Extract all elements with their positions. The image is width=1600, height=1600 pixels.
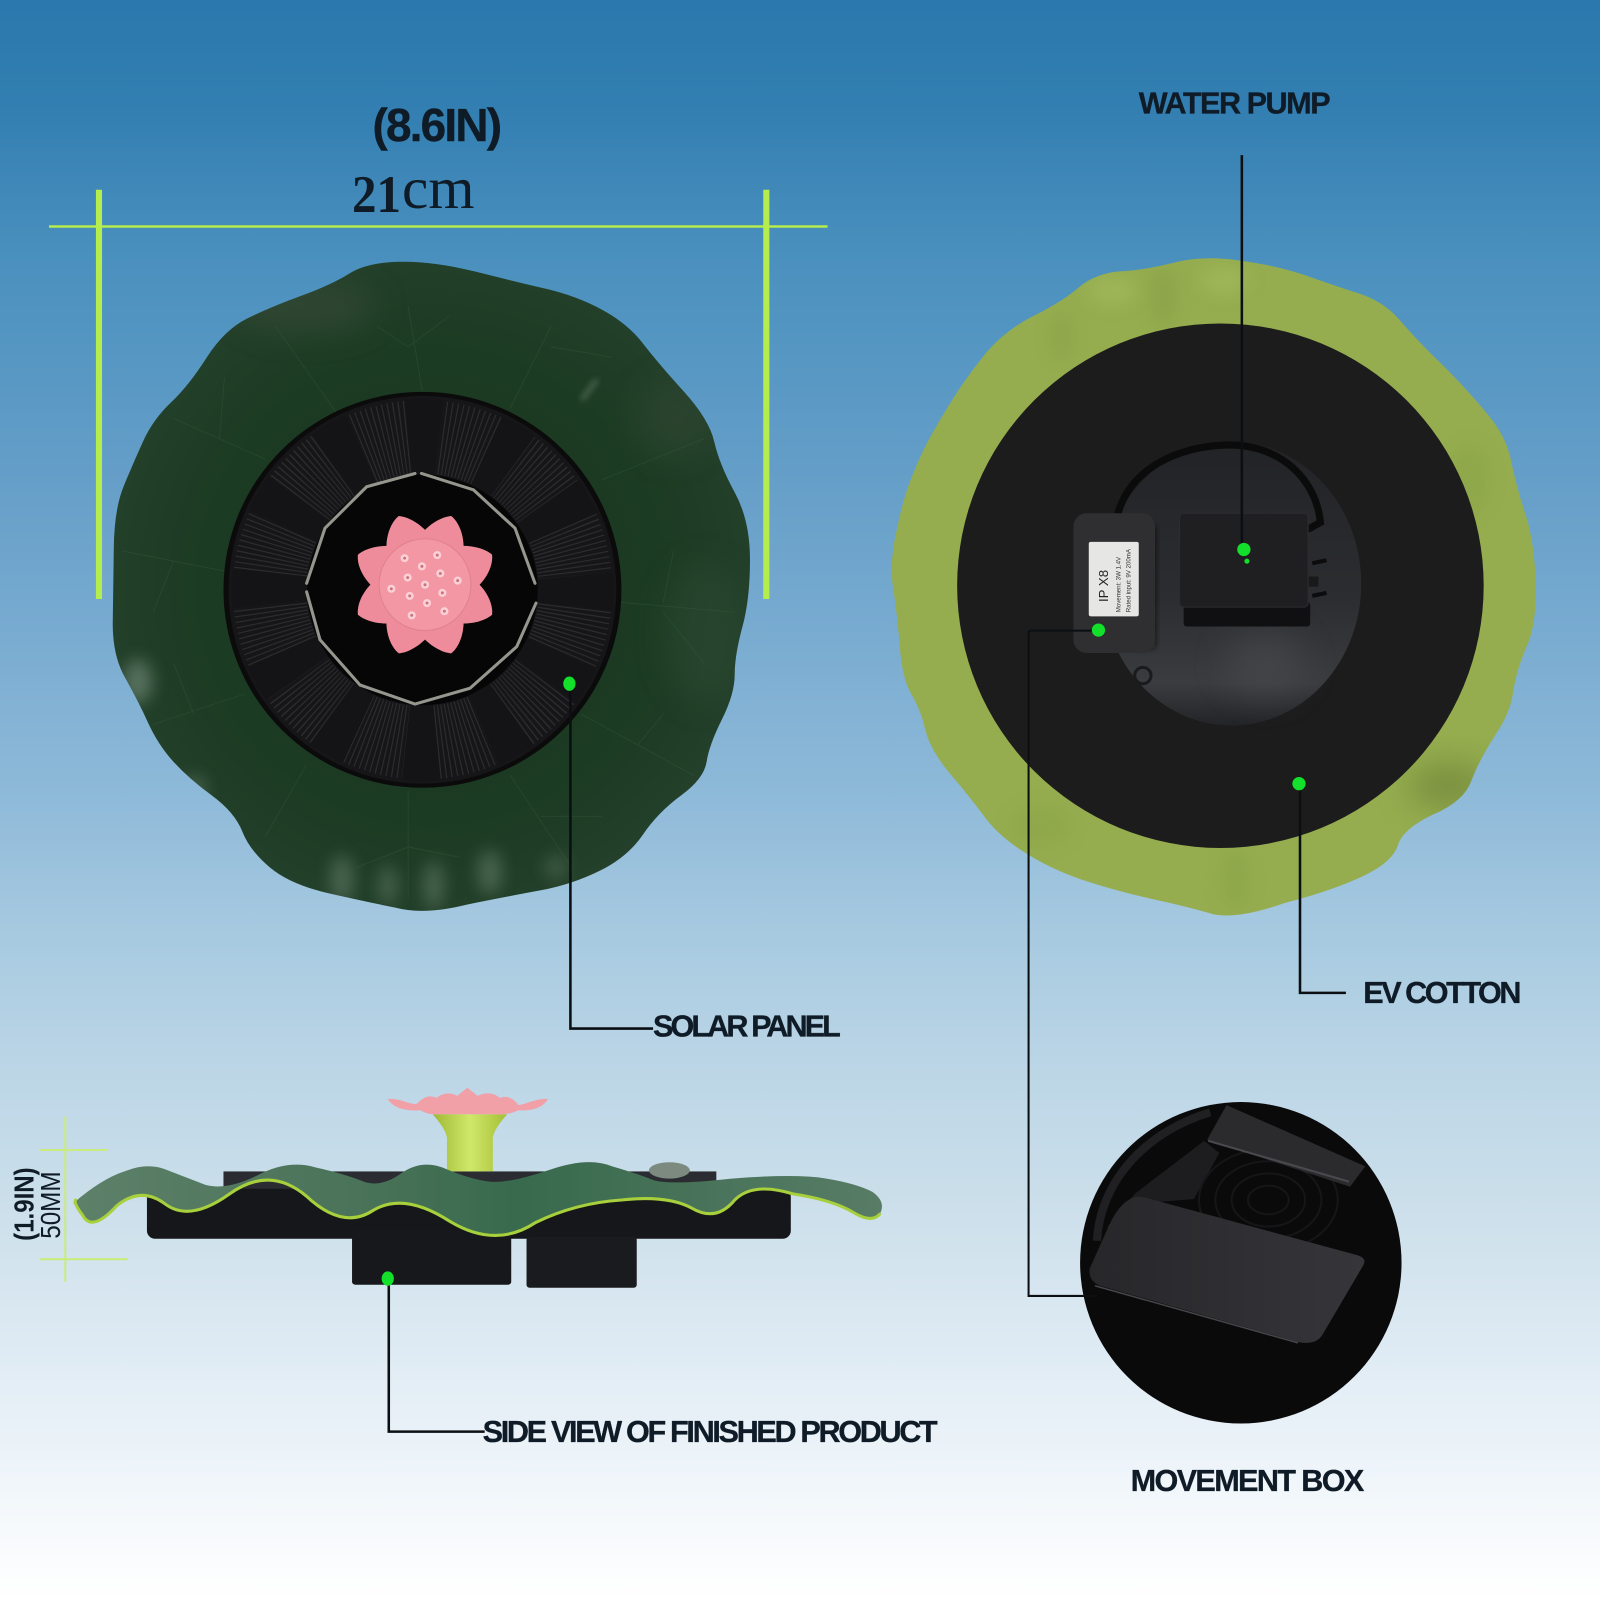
- green stem: [433, 1114, 507, 1171]
- movement box with label: Rated input: 9V 200mA: [1126, 548, 1133, 612]
- panel: underside of lotus leaf: [892, 258, 1536, 916]
- dimension bracket: 21 cm width: [49, 190, 828, 599]
- solar panel edge: [223, 1171, 716, 1190]
- small stud on panel: [649, 1162, 690, 1179]
- callout: movement box: MOVEMENT BOX: [1131, 1464, 1365, 1498]
- water pump housing: [1180, 513, 1310, 627]
- callout: water pump: [1139, 86, 1331, 564]
- inset: movement box close-up: [1080, 1102, 1402, 1423]
- solar panel: [223, 392, 621, 788]
- callout: movement box: [1029, 623, 1365, 1498]
- EV cotton foam disc: [957, 323, 1484, 848]
- dimension bracket: 50 mm height: [40, 1116, 128, 1282]
- callout: water pump: WATER PUMP: [1139, 86, 1331, 120]
- dimension label: centimetres: cm: [402, 155, 474, 221]
- leaf top surface: [113, 262, 750, 911]
- light green leaf underside: [892, 258, 1536, 916]
- housing back plate: [1102, 442, 1361, 726]
- movement box with label: [1073, 513, 1155, 653]
- dimension label: millimetres height: 50MM: [35, 1171, 66, 1239]
- dimension label: inches height: (1.9IN): [9, 1167, 40, 1241]
- movement box with label: IP X8: [1096, 570, 1111, 602]
- callout: side view of finished product: SIDE VIEW OF FINISHED PRODUCT: [483, 1415, 938, 1449]
- cable arc: [1097, 1112, 1210, 1241]
- lower large box: [1090, 1197, 1364, 1343]
- dimension label: centimetres: 21: [352, 166, 401, 224]
- callout: solar panel: SOLAR PANEL: [653, 1010, 841, 1044]
- panel: top view of lotus leaf with solar panel: [113, 262, 750, 911]
- callout: solar panel: [563, 677, 841, 1044]
- dimension label: centimetres: [352, 155, 474, 224]
- right housing leg: [527, 1237, 637, 1288]
- coil spring detail: [1198, 1152, 1338, 1242]
- lotus flower nozzle: [347, 507, 503, 662]
- callout: EV cotton: [1292, 777, 1521, 1010]
- pink flower profile: [388, 1088, 548, 1114]
- left housing leg: [352, 1230, 511, 1285]
- silver busbar ring: [307, 473, 536, 704]
- upper box: [1207, 1105, 1365, 1187]
- callout: side view of finished product: [382, 1271, 938, 1449]
- foam base: [147, 1189, 791, 1239]
- callout: EV cotton: EV COTTON: [1363, 976, 1521, 1010]
- dimension label: inches: (8.6IN): [372, 99, 502, 151]
- movement box with label: Movement: 3W 1.4V: [1115, 556, 1122, 612]
- wavy leaf: [73, 1162, 882, 1235]
- panel: side view of product: [73, 1088, 882, 1288]
